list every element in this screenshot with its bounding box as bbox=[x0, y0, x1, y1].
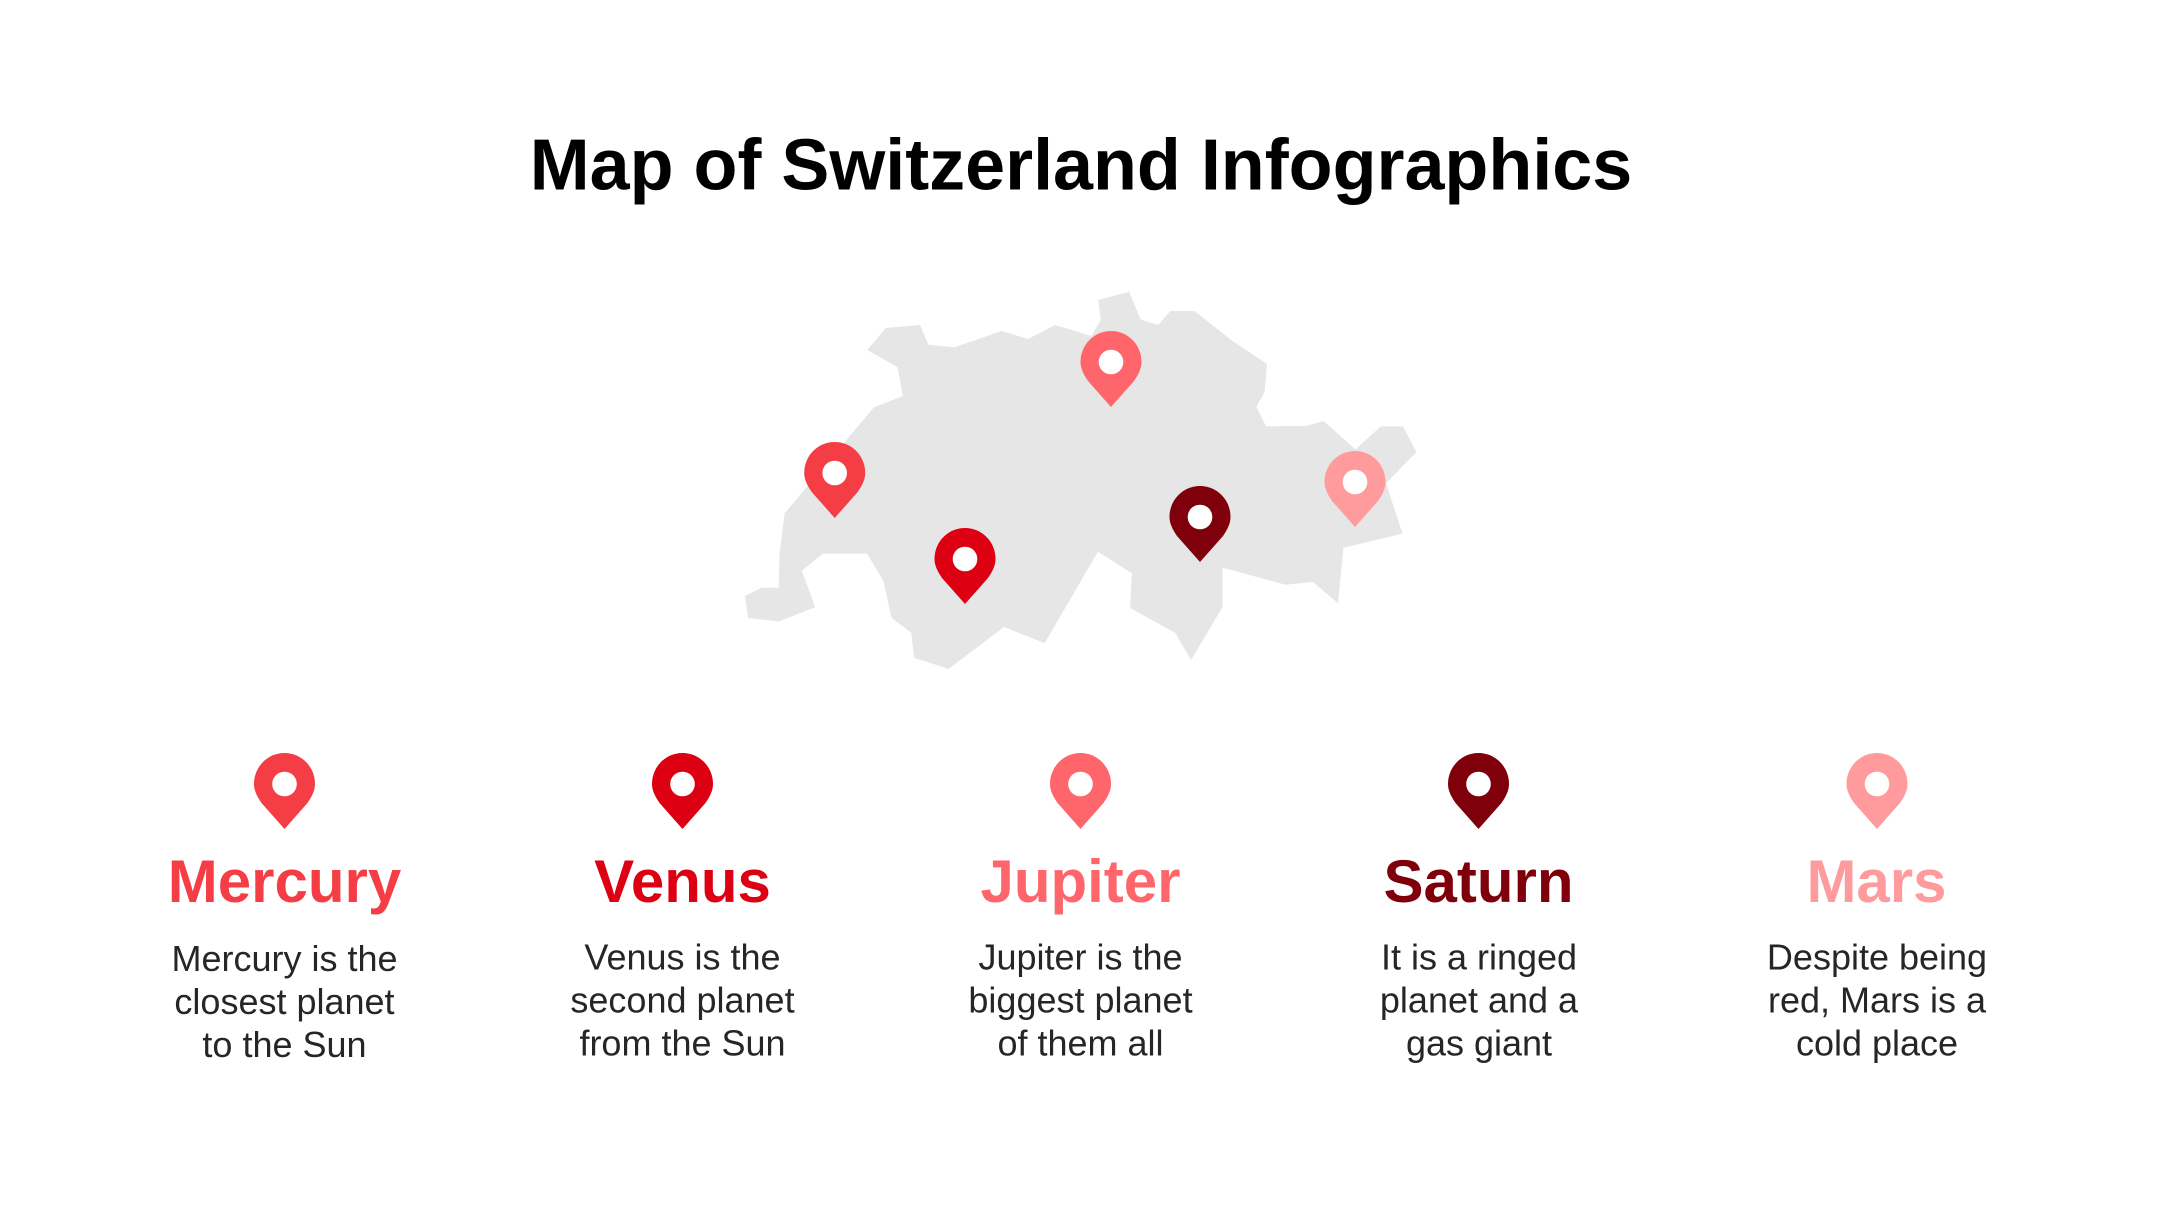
description: Mars: cold place bbox=[1796, 1022, 1958, 1064]
description: Venus: Venus is the bbox=[584, 936, 781, 978]
heading: Saturn: Saturn bbox=[1383, 848, 1574, 915]
icon: Jupiter pin bbox=[1050, 753, 1111, 829]
map pin: Mercury bbox=[804, 442, 865, 518]
icon: Saturn pin bbox=[1448, 753, 1509, 829]
panel: Mars bbox=[1767, 753, 1987, 1064]
description: Mercury: to the Sun bbox=[202, 1024, 367, 1065]
heading: Jupiter: Jupiter bbox=[980, 848, 1181, 915]
description: Jupiter: biggest planet bbox=[968, 980, 1193, 1020]
description: Saturn: planet and a bbox=[1380, 980, 1579, 1020]
description: Saturn: It is a ringed bbox=[1381, 936, 1577, 978]
heading: Mercury: Mercury bbox=[168, 848, 402, 915]
panel: Jupiter bbox=[968, 753, 1193, 1064]
map pin: Venus bbox=[934, 528, 996, 604]
map pin: Saturn bbox=[1170, 486, 1230, 562]
panel: Saturn bbox=[1380, 753, 1579, 1064]
map pin: Jupiter bbox=[1080, 331, 1142, 407]
heading: Venus: Venus bbox=[594, 848, 771, 915]
description: Saturn: gas giant bbox=[1406, 1022, 1552, 1064]
map shape bbox=[745, 292, 1416, 669]
description: Venus: from the Sun bbox=[579, 1022, 786, 1064]
map pin: Mars bbox=[1324, 451, 1386, 527]
description: Jupiter: Jupiter is the bbox=[978, 936, 1183, 978]
description: Mercury: closest planet bbox=[174, 981, 395, 1022]
panel: Venus bbox=[570, 753, 795, 1064]
icon: Venus pin bbox=[652, 753, 713, 829]
title: Map of Switzerland Infographics bbox=[530, 126, 1632, 206]
icon: Mercury pin bbox=[254, 753, 315, 829]
heading: Mars: Mars bbox=[1806, 848, 1947, 915]
map of Switzerland with pins bbox=[745, 292, 1416, 669]
description: Mars: Despite being bbox=[1767, 936, 1987, 978]
panel: Mercury bbox=[168, 753, 402, 1065]
description: Venus: second planet bbox=[570, 980, 795, 1020]
icon: Mars pin bbox=[1846, 753, 1908, 829]
description: Mars: red, Mars is a bbox=[1768, 980, 1987, 1020]
description: Jupiter: of them all bbox=[997, 1022, 1164, 1064]
description: Mercury: Mercury is the bbox=[171, 938, 398, 979]
